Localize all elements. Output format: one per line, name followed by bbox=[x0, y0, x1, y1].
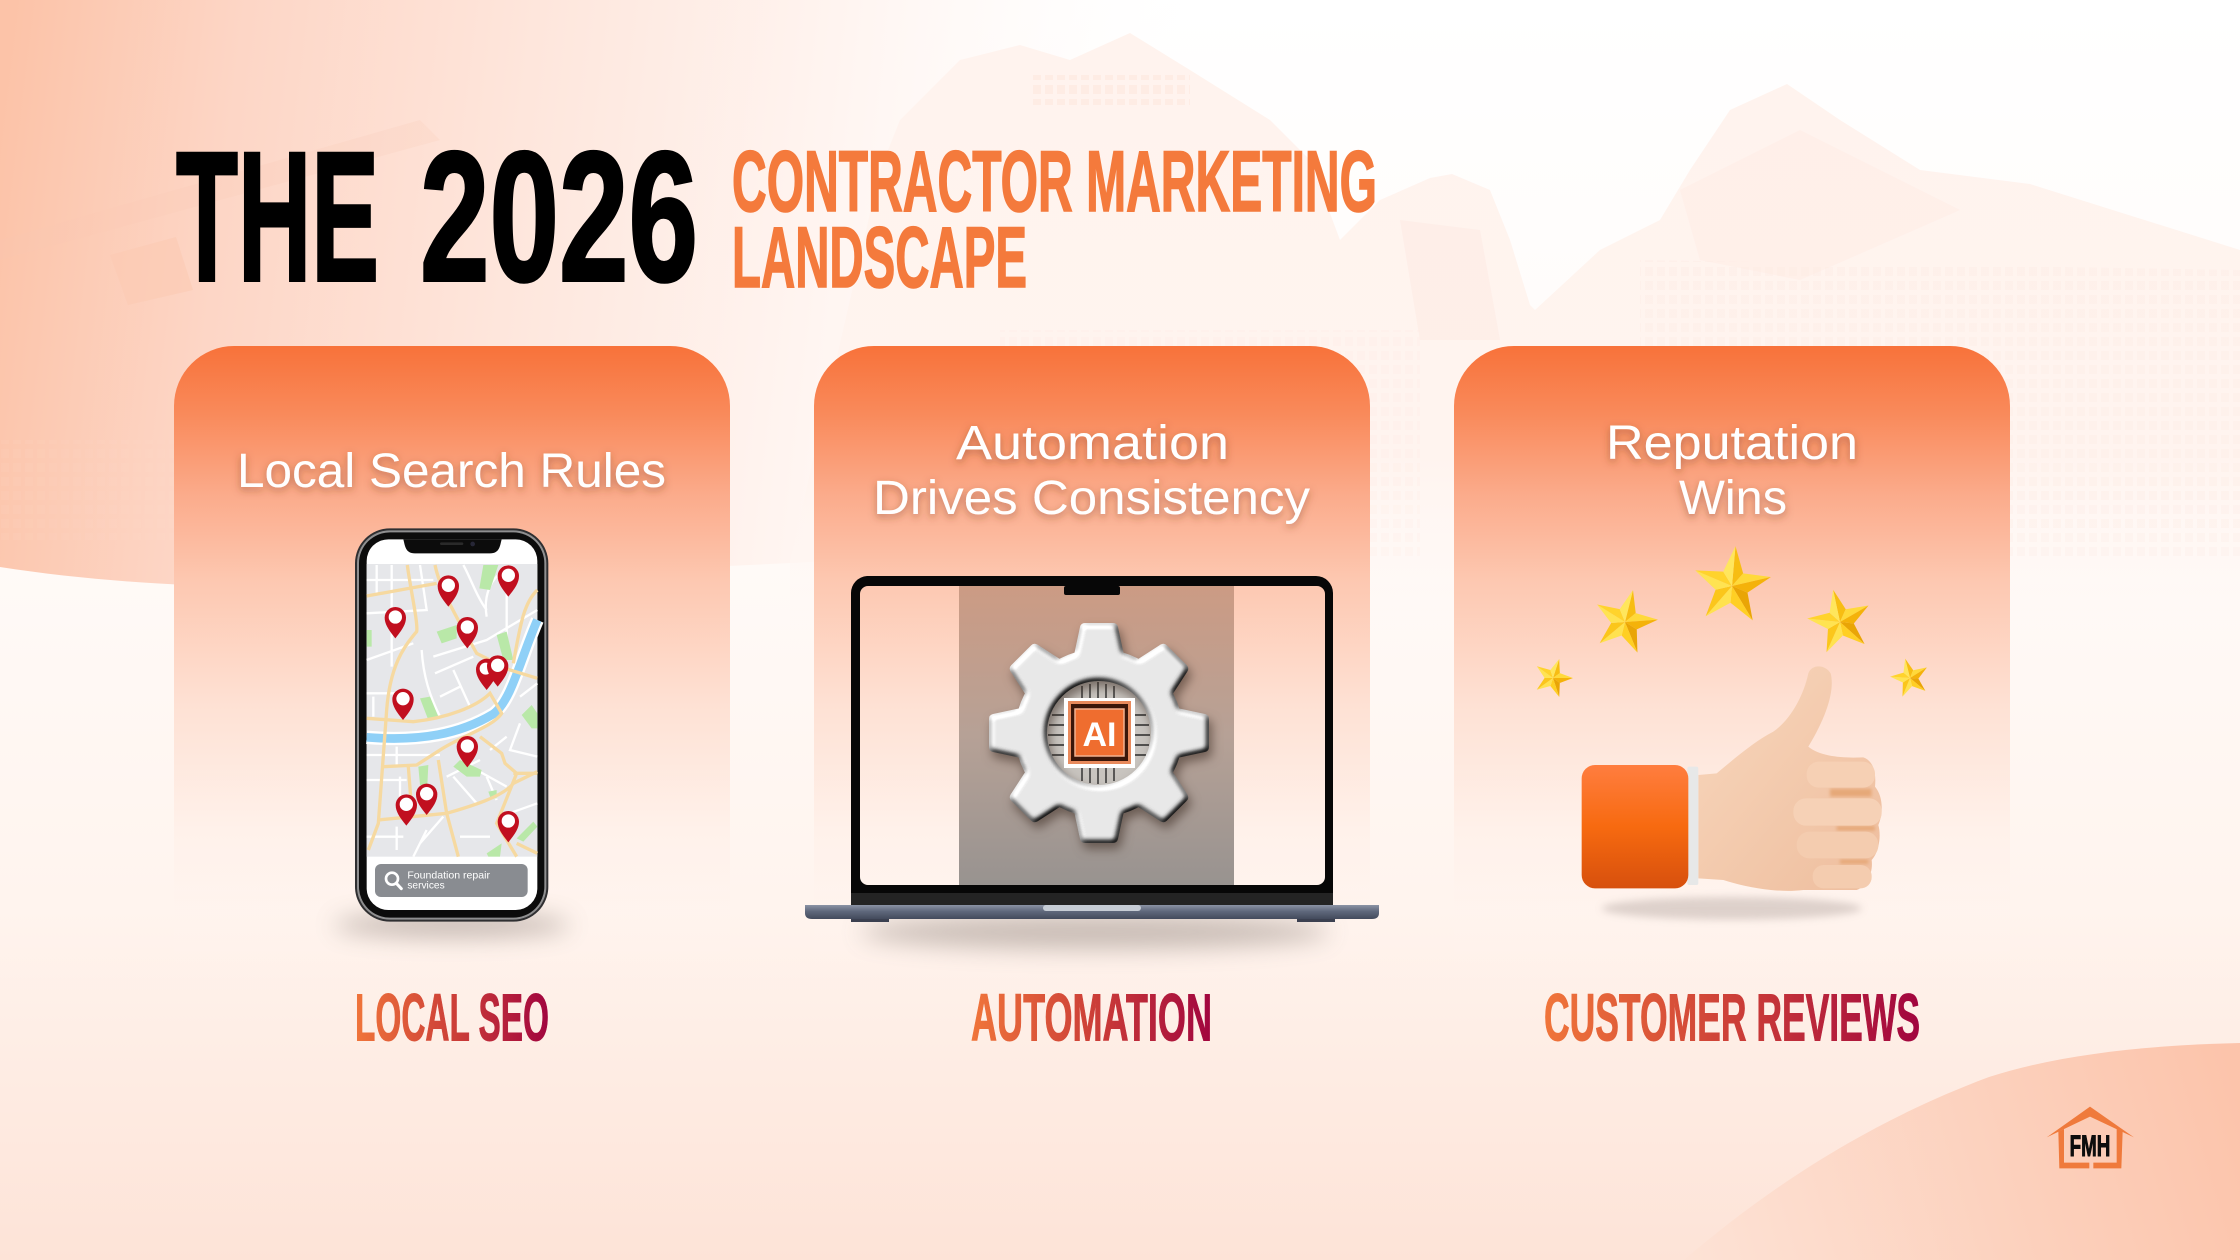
text: LOCAL SEO bbox=[355, 980, 549, 1056]
gear bbox=[989, 623, 1209, 843]
background: upper left wave bbox=[0, 0, 1300, 587]
icon: five stars bbox=[1530, 543, 1932, 699]
panel: local seo bbox=[174, 346, 730, 966]
background: faint crane and square bbox=[0, 120, 440, 540]
card heading: Automation bbox=[956, 417, 1229, 470]
ai chip bbox=[1064, 698, 1135, 768]
laptop base bbox=[805, 905, 1379, 919]
label: automation: AUTOMATION bbox=[971, 980, 1212, 1056]
card heading: Drives Consistency bbox=[873, 472, 1310, 525]
shirt strip bbox=[1687, 767, 1698, 885]
search bar: services bbox=[407, 880, 445, 891]
orange cuff bbox=[1582, 765, 1688, 888]
title: THE 2026: THE bbox=[176, 114, 379, 320]
card background bbox=[1454, 346, 2010, 966]
panel: customer reviews bbox=[1454, 346, 2010, 966]
lid bezel bbox=[851, 576, 1333, 905]
ai chip: AI bbox=[1082, 716, 1116, 754]
title: THE 2026: 2026 bbox=[420, 114, 698, 320]
icon: laptop bbox=[805, 576, 1379, 922]
screen image band bbox=[959, 586, 1234, 885]
subtitle line 2: LANDSCAPE bbox=[732, 210, 1027, 306]
background: lower right wave bbox=[1684, 1043, 2240, 1260]
card background bbox=[174, 346, 730, 966]
icon: ai gear bbox=[989, 623, 1209, 843]
finger gaps bbox=[1830, 789, 1875, 864]
hand bbox=[1698, 666, 1882, 891]
circuit lines bbox=[1048, 682, 1150, 784]
subtitle bbox=[732, 134, 1377, 306]
subtitle line 1: CONTRACTOR MARKETING bbox=[732, 134, 1377, 230]
label: customer reviews: CUSTOMER REVIEWS bbox=[1544, 980, 1920, 1056]
card heading bbox=[1606, 417, 1858, 525]
card heading bbox=[873, 417, 1310, 525]
map pins bbox=[385, 565, 519, 842]
panel: automation bbox=[805, 346, 1379, 966]
card heading: Wins bbox=[1679, 472, 1787, 525]
card heading: Reputation bbox=[1606, 417, 1858, 470]
logo: fmh house: FMH bbox=[2070, 1130, 2110, 1163]
background: skyline watermark bbox=[790, 33, 2240, 640]
phone shadow bbox=[334, 913, 570, 937]
icon: thumbs up hand bbox=[1582, 666, 1882, 920]
card heading: Local Search Rules bbox=[237, 445, 666, 498]
search bar: Foundation repair bbox=[407, 870, 491, 881]
logo: fmh house bbox=[2047, 1107, 2134, 1168]
hand shadow bbox=[1602, 897, 1862, 920]
card background bbox=[814, 346, 1370, 966]
search bar bbox=[375, 864, 528, 897]
map bbox=[367, 564, 537, 857]
notch bbox=[403, 539, 502, 553]
laptop shadow bbox=[860, 915, 1330, 949]
icon: phone with map bbox=[355, 528, 548, 922]
